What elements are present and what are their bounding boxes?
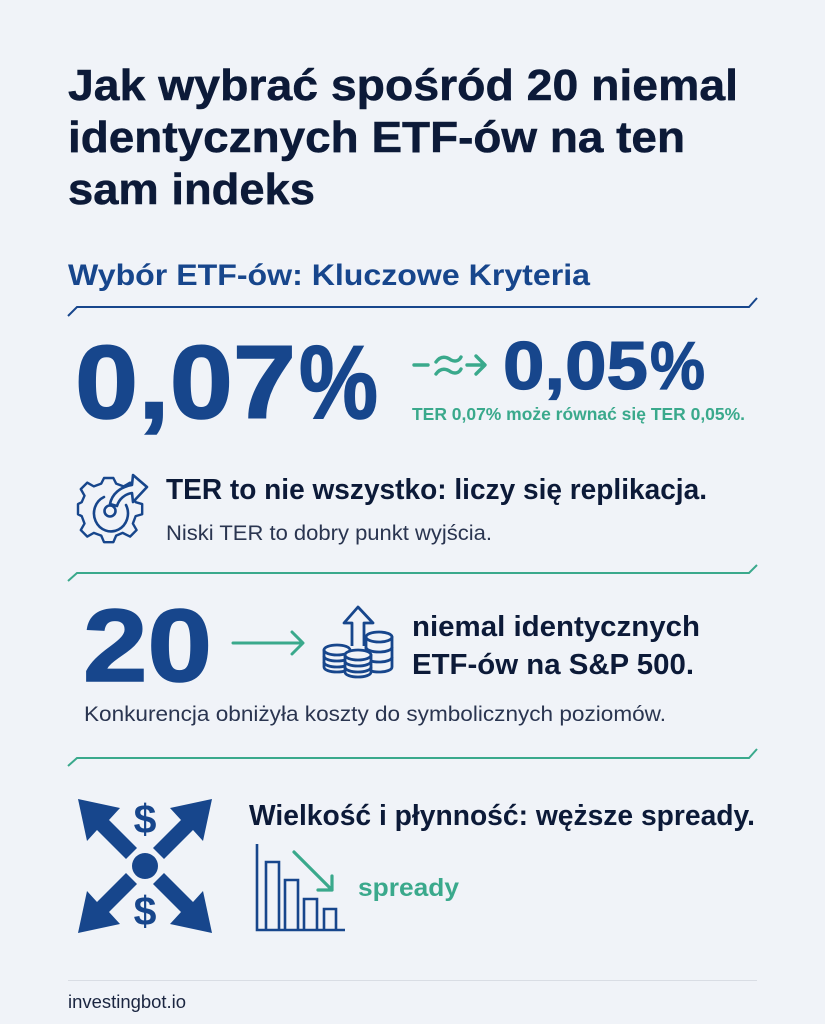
title: Jak wybrać spośród 20 niemal	[68, 62, 738, 110]
text: 20 ETF description: niemal identycznych	[412, 611, 700, 643]
heading: size and liquidity: Wielkość i płynność: węższe spready.	[249, 800, 755, 832]
big stat: 0,07%: 0,07	[75, 325, 296, 441]
big stat: 0,07%	[75, 325, 378, 441]
text: 20 ETF description	[412, 611, 700, 681]
stat: 0,05%	[503, 328, 705, 404]
title: sam indeks	[68, 166, 315, 214]
stat: 0,05%: 0,05	[503, 328, 648, 404]
icon: four arrows with dollars: $	[134, 796, 157, 842]
heading: TER: TER to nie wszystko: liczy się replikacja.	[166, 474, 707, 506]
big stat: 20: 20	[83, 588, 212, 703]
icon: coins with up arrow	[324, 607, 392, 677]
text: 20 ETF description: ETF-ów na S&P 500.	[412, 649, 694, 681]
icon: four arrows with dollars: $	[134, 888, 157, 934]
icon: gear with arrow	[78, 475, 147, 542]
footer: investingbot.io	[68, 992, 186, 1012]
arrow	[233, 632, 303, 654]
stat: 0,05%: %	[650, 328, 705, 404]
stat caption: TER 0,07% może równać się TER 0,05%.	[412, 404, 745, 424]
icon: four arrows with dollars	[78, 796, 212, 934]
text: competition note: Konkurencja obniżyła koszty do symbolicznych poziomów.	[84, 703, 666, 726]
label: spready: spready	[358, 874, 459, 902]
title	[68, 62, 738, 214]
big stat: 0,07%: %	[299, 325, 378, 441]
icon: approximately arrow	[414, 356, 485, 374]
section heading: Wybór ETF-ów: Kluczowe Kryteria	[68, 259, 590, 292]
text: TER note: Niski TER to dobry punkt wyjścia.	[166, 522, 492, 545]
icon: falling bars chart	[257, 844, 345, 930]
title: identycznych ETF-ów na ten	[68, 114, 685, 162]
